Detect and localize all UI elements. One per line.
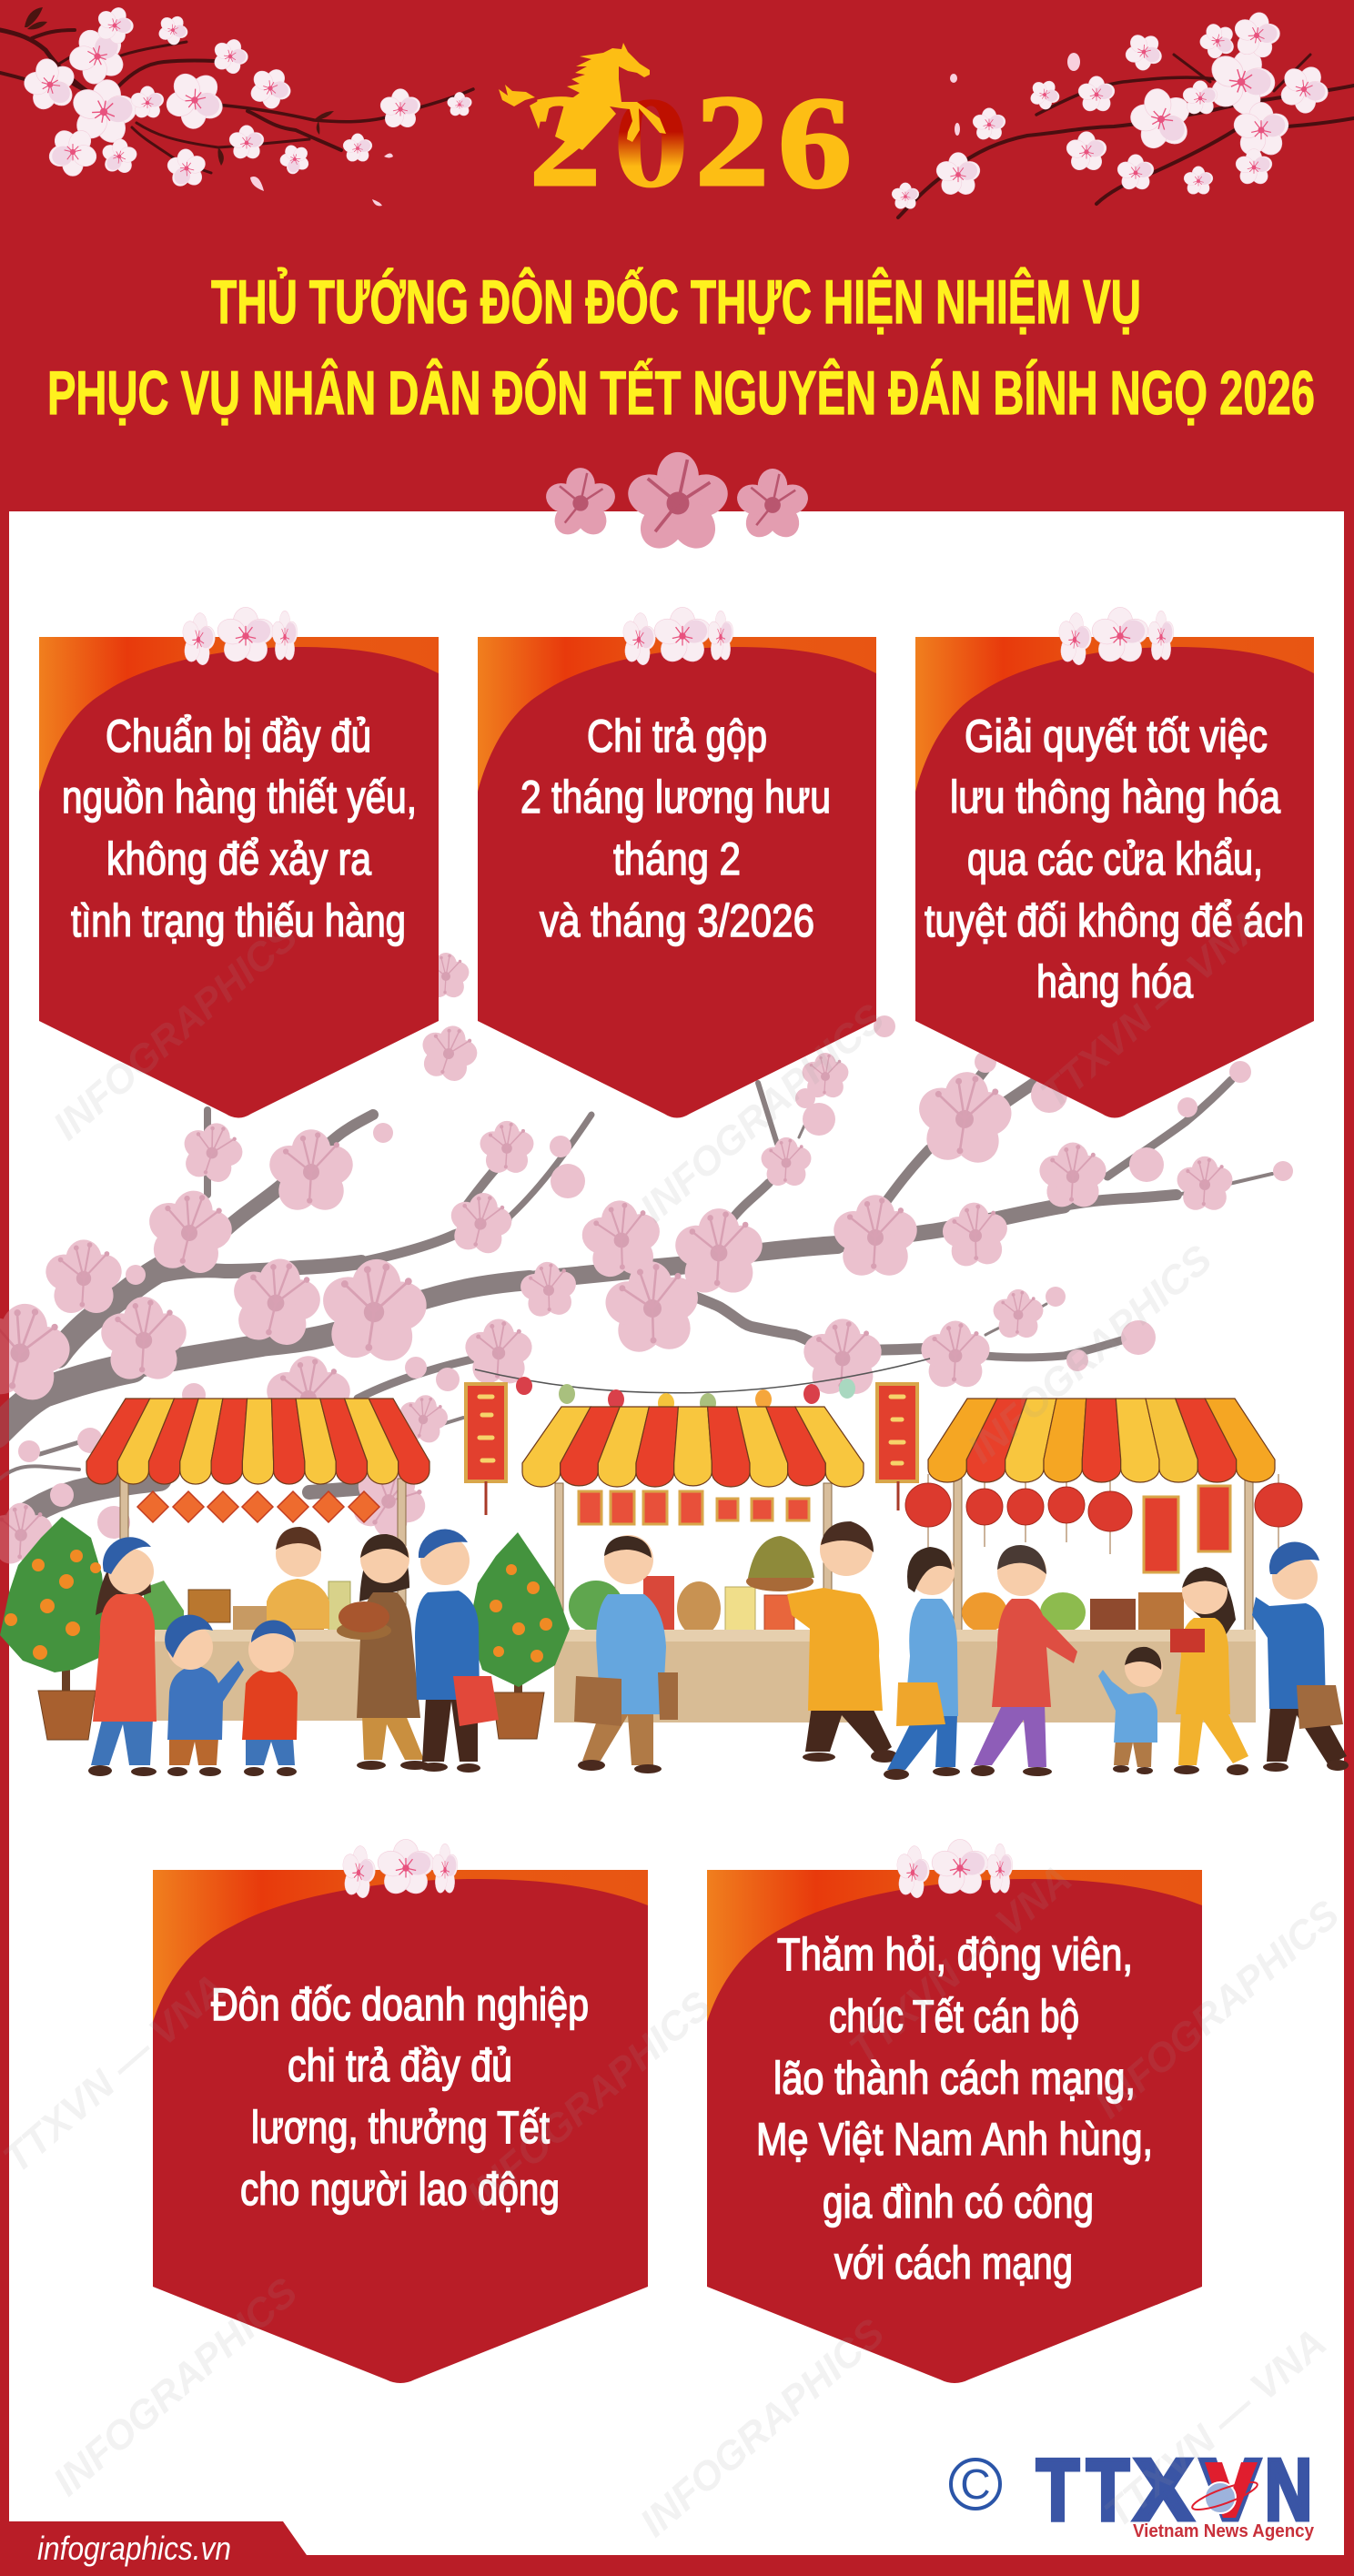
panel: card 4 banner — [153, 1870, 648, 2383]
card 4 text: cho người lao động — [240, 2164, 560, 2215]
card 5 text: Mẹ Việt Nam Anh hùng, — [756, 2114, 1153, 2165]
fruit plate — [337, 1621, 391, 1640]
logo: TTXVN Vietnam News Agency: Vietnam News Agency — [1133, 2521, 1315, 2541]
header sprig: left plum blossom branch — [0, 1, 473, 206]
logo: golden horse over 2026 — [499, 43, 852, 216]
card 1 text — [62, 711, 417, 946]
card 3 text — [925, 711, 1304, 1007]
card 1 text: tình trạng thiếu hàng — [71, 895, 406, 946]
logo: TTXVN Vietnam News Agency: V — [1200, 2441, 1260, 2539]
card 5 text: gia đình có công — [823, 2177, 1094, 2227]
stall 3 banners — [1144, 1486, 1230, 1572]
footer tab: infographics.vn — [0, 2521, 1354, 2576]
illustration: cherry blossom tree branches — [0, 1069, 1272, 1538]
card 2 text: Chi trả gộp — [587, 711, 767, 762]
icon: three pink blossoms on panel edge — [542, 452, 812, 557]
copyright mark: C — [960, 2460, 991, 2508]
logo: TTXVN Vietnam News Agency: T — [1036, 2441, 1079, 2539]
stall 3 goods — [962, 1592, 1184, 1632]
year 2026: 0 — [612, 71, 690, 216]
logo: TTXVN Vietnam News Agency: X — [1134, 2441, 1193, 2539]
card 2 text: và tháng 3/2026 — [540, 895, 814, 946]
watermarks: TTXVN — VNA — [1032, 901, 1271, 1117]
panel: card 2 banner — [478, 637, 876, 1117]
card 3 text: hàng hóa — [1036, 956, 1193, 1007]
panel: card 1 banner — [39, 637, 439, 1117]
person: woman in brown ao dai — [337, 1534, 429, 1770]
person: man in blue ao dai with red bag — [415, 1530, 499, 1773]
watermarks: INFOGRAPHICS — [632, 995, 893, 1231]
icon: card 5 blossoms — [892, 1839, 1015, 1906]
white content panel — [9, 511, 1344, 2555]
person: man in blue with shopping bag — [1252, 1542, 1349, 1772]
year 2026: 6 — [778, 71, 852, 216]
card 1 text: nguồn hàng thiết yếu, — [62, 772, 417, 823]
logo: TTXVN Vietnam News Agency — [1036, 2441, 1315, 2541]
watermarks: INFOGRAPHICS — [1086, 1892, 1348, 2127]
watermarks: INFOGRAPHICS — [632, 2310, 893, 2546]
title — [47, 267, 1315, 428]
watermarks: INFOGRAPHICS — [459, 1983, 720, 2218]
stall 1 seller — [267, 1527, 329, 1629]
card 3 text: Giải quyết tốt việc — [965, 711, 1268, 762]
person: little girl in light blue — [1098, 1647, 1163, 1774]
kumquat tree left — [0, 1517, 106, 1740]
stall 2 hanging banners — [579, 1491, 809, 1524]
panel: card 5 banner — [707, 1870, 1202, 2383]
illustration: lantern string between stalls — [475, 1359, 930, 1413]
icon: card 2 blossoms — [618, 607, 735, 673]
stall 3 — [905, 1399, 1302, 1722]
stall 1 — [86, 1399, 429, 1721]
icon: card 1 blossoms — [177, 607, 299, 673]
fallen petals left — [250, 153, 393, 206]
stall 2 goods — [569, 1576, 794, 1636]
stall 3 lanterns — [905, 1474, 1302, 1565]
panel: card 3 banner — [915, 637, 1314, 1117]
card 3 text: lưu thông hàng hóa — [950, 772, 1280, 823]
copyright mark — [951, 2460, 1000, 2509]
card 2 text: tháng 2 — [613, 833, 741, 884]
icon: card 3 blossoms — [1054, 607, 1176, 673]
person: woman in yellow with gift box — [1170, 1567, 1248, 1775]
card 4 text: chi trả đầy đủ — [288, 2040, 512, 2091]
person: man in light blue with shopping bags — [574, 1535, 678, 1773]
watermarks — [0, 901, 1348, 2546]
watermarks: TTXVN — VNA — [1096, 2320, 1335, 2537]
watermarks: TTXVN — VNA — [0, 1965, 234, 2182]
card 2 text — [520, 711, 831, 946]
kumquat tree right — [469, 1532, 570, 1739]
card 4 text — [211, 1979, 589, 2215]
fruit tray — [746, 1571, 813, 1591]
year 2026 — [530, 69, 852, 216]
stall 1 goods — [144, 1581, 350, 1633]
stall 2 — [522, 1407, 864, 1722]
card 1 text: Chuẩn bị đầy đủ — [106, 711, 371, 762]
card 5 text: với cách mạng — [834, 2238, 1073, 2288]
card 3 text: qua các cửa khẩu, — [967, 833, 1263, 884]
person: man in yellow holding fruit tray — [746, 1521, 898, 1763]
card 4 text: lương, thưởng Tết — [251, 2102, 550, 2153]
stall 1 awning — [86, 1399, 429, 1484]
watermarks: TTXVN — VNA — [841, 1856, 1080, 2073]
card 2 text: 2 tháng lương hưu — [520, 772, 831, 823]
person: woman in red with purple trousers — [971, 1545, 1077, 1776]
card 5 text: lão thành cách mạng, — [773, 2053, 1136, 2104]
logo: TTXVN Vietnam News Agency: N — [1265, 2441, 1312, 2539]
illustration: cherry blossom flowers — [0, 953, 1293, 1570]
hanging scroll banners — [466, 1384, 917, 1515]
icon: card 4 blossoms — [338, 1839, 460, 1906]
horse tail — [499, 85, 535, 106]
person: boy in red ao dai — [242, 1620, 298, 1776]
left edge frame overlapping the tree — [0, 1310, 9, 1565]
person: woman in light blue with yellow bag — [884, 1547, 960, 1780]
fallen petals right — [950, 53, 1080, 136]
watermarks: INFOGRAPHICS — [959, 1237, 1220, 1472]
card 5 text — [756, 1929, 1153, 2288]
person: woman in red ao dai — [88, 1537, 157, 1776]
logo: TTXVN Vietnam News Agency: T — [1086, 2441, 1129, 2539]
card 4 text: Đôn đốc doanh nghiệp — [211, 1979, 589, 2030]
stall 1 hanging diamonds — [137, 1491, 379, 1522]
person: boy in blue ao dai — [165, 1615, 244, 1776]
footer tab: infographics.vn: infographics.vn — [37, 2530, 231, 2567]
stall 3 awning — [928, 1399, 1275, 1482]
card 5 text: chúc Tết cán bộ — [829, 1991, 1079, 2042]
watermarks: INFOGRAPHICS — [45, 2269, 306, 2505]
stall 2 awning — [522, 1407, 864, 1487]
year 2026: 2 — [695, 69, 769, 214]
watermarks: INFOGRAPHICS — [45, 914, 306, 1149]
horse silhouette — [530, 43, 666, 150]
card 1 text: không để xảy ra — [106, 833, 371, 884]
card 5 text: Thăm hỏi, động viên, — [777, 1929, 1133, 1980]
header sprig: right plum blossom branch — [890, 8, 1354, 217]
year 2026: 2 — [530, 69, 601, 214]
